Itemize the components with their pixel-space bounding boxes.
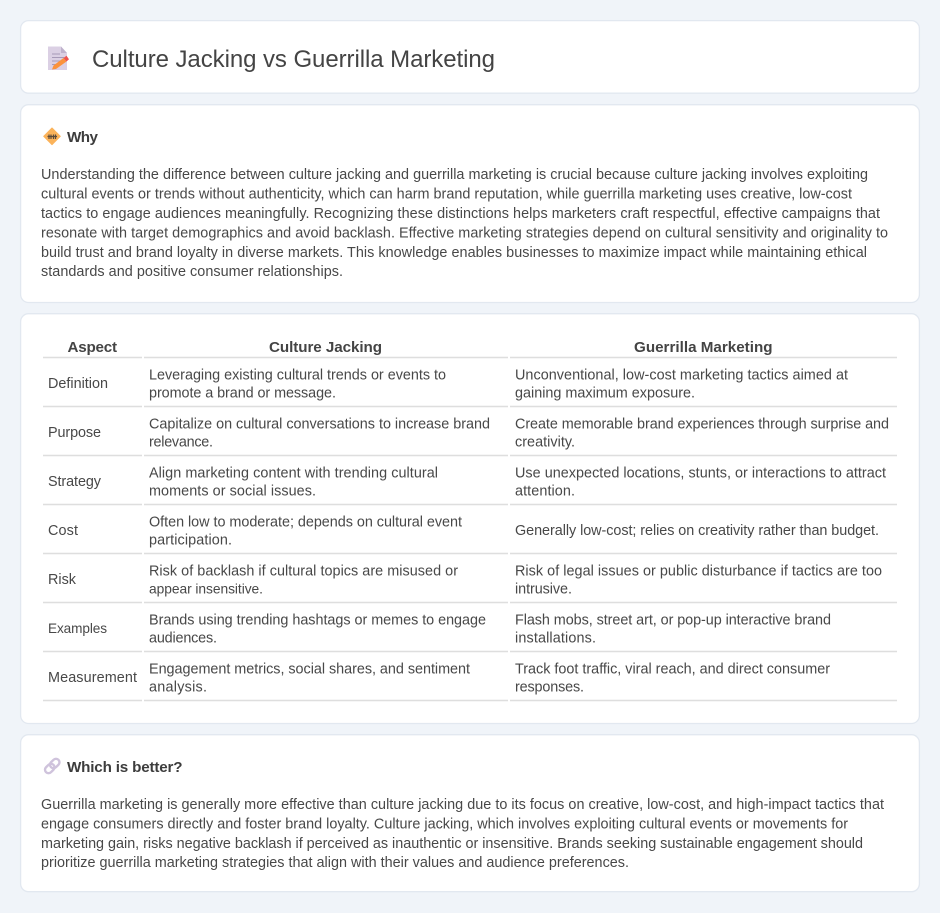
row: definition: [48, 367, 848, 401]
row: measurement: responses.: [515, 679, 584, 695]
row: purpose: relevance.: [149, 434, 213, 450]
row: measurement: Measurement: [48, 670, 137, 686]
row: strategy: Use unexpected locations, stunts, or interactions to attract: [515, 465, 886, 481]
row: measurement: Engagement metrics, social shares, and sentiment: [149, 661, 470, 677]
row: examples: installations.: [515, 630, 596, 646]
row: examples: Examples: [48, 621, 107, 636]
row: risk: Risk of legal issues or public disturbance if tactics are too: [515, 563, 882, 579]
panel: which is better: [21, 735, 919, 892]
row: cost: Cost: [48, 523, 78, 539]
panel: comparison table: [21, 314, 919, 724]
text block: why paragraph: tactics to engage audiences meaningfully. Recognizing these distinctions helps marketers craft respectful, effective campaigns that: [41, 206, 880, 222]
row: strategy: attention.: [515, 483, 575, 499]
icon: chain link: [44, 757, 61, 775]
row: measurement: analysis.: [149, 679, 207, 695]
row: strategy: [48, 465, 886, 499]
table header row: Guerrilla Marketing: [634, 339, 772, 356]
heading: which is better: Which is better?: [67, 759, 182, 776]
text block: why paragraph: Understanding the difference between culture jacking and guerrilla marketing is crucial because culture jacking involves exploiting: [41, 167, 868, 183]
panel: why: [21, 105, 919, 302]
text block: why paragraph: cultural events or trends without authenticity, which can harm brand reputation, while guerrilla marketing uses creative, low-cost: [41, 186, 852, 202]
row: strategy: moments or social issues.: [149, 483, 316, 499]
row: purpose: Purpose: [48, 425, 101, 441]
row: purpose: [48, 416, 889, 450]
icon: diamond warning sign: [44, 128, 60, 145]
table header row: Aspect: [68, 339, 117, 356]
row: examples: Flash mobs, street art, or pop-up interactive brand: [515, 612, 831, 628]
row: purpose: Capitalize on cultural conversations to increase brand: [149, 416, 490, 432]
text block: which is better paragraph: Guerrilla marketing is generally more effective than culture jacking due to its focus on creative, low-cost, and high-impact tactics that: [41, 797, 884, 813]
text block: why paragraph: standards and positive consumer relationships.: [41, 264, 343, 280]
text block: why paragraph: build trust and brand loyalty in diverse markets. This knowledge enables businesses to maximize impact while maintaining ethical: [41, 245, 867, 261]
row: cost: participation.: [149, 532, 232, 548]
row: purpose: Create memorable brand experiences through surprise and: [515, 416, 889, 432]
row: risk: Risk: [48, 572, 77, 588]
row: definition: Leveraging existing cultural trends or events to: [149, 367, 446, 383]
row: strategy: Strategy: [48, 474, 102, 490]
text block: which is better paragraph: engage consumers directly and foster brand loyalty. Culture jacking, which involves exploiting cultural events or movements for: [41, 816, 848, 832]
title: Culture Jacking vs Guerrilla Marketing: [92, 46, 495, 73]
text block: which is better paragraph: [41, 797, 884, 871]
heading: why: Why: [67, 129, 99, 146]
row: measurement: [48, 661, 830, 695]
row: definition: Unconventional, low-cost marketing tactics aimed at: [515, 367, 848, 383]
panel: header: [21, 21, 919, 93]
row: measurement: Track foot traffic, viral reach, and direct consumer: [515, 661, 830, 677]
row: purpose: creativity.: [515, 434, 575, 450]
text block: why paragraph: resonate with target demographics and avoid backlash. Effective marketing strategies depend on cultural sensitivity and originality to: [41, 226, 888, 242]
row: cost: Generally low-cost; relies on creativity rather than budget.: [515, 523, 879, 539]
icon: memo with pencil: [48, 46, 69, 70]
table header row: [68, 339, 772, 356]
row: strategy: Align marketing content with trending cultural: [149, 465, 438, 481]
row: risk: Risk of backlash if cultural topics are misused or: [149, 563, 458, 579]
text block: why paragraph: [41, 167, 888, 280]
row: risk: [48, 563, 882, 597]
row: definition: Definition: [48, 376, 108, 392]
text block: which is better paragraph: marketing gain, risks negative backlash if perceived as inauthentic or insensitive. Brands seeking sustainable engagement should: [41, 836, 863, 852]
row: examples: [48, 612, 831, 646]
row: definition: promote a brand or message.: [149, 385, 336, 401]
table header row: Culture Jacking: [269, 339, 382, 356]
text block: which is better paragraph: prioritize guerrilla marketing strategies that align with their values and audience preferences.: [41, 855, 629, 871]
row: risk: intrusive.: [515, 581, 572, 597]
row: cost: [48, 514, 879, 548]
row: examples: audiences.: [149, 630, 217, 646]
row: definition: gaining maximum exposure.: [515, 385, 695, 401]
row: examples: Brands using trending hashtags or memes to engage: [149, 612, 486, 628]
row: risk: appear insensitive.: [149, 581, 263, 596]
row: cost: Often low to moderate; depends on cultural event: [149, 514, 462, 530]
